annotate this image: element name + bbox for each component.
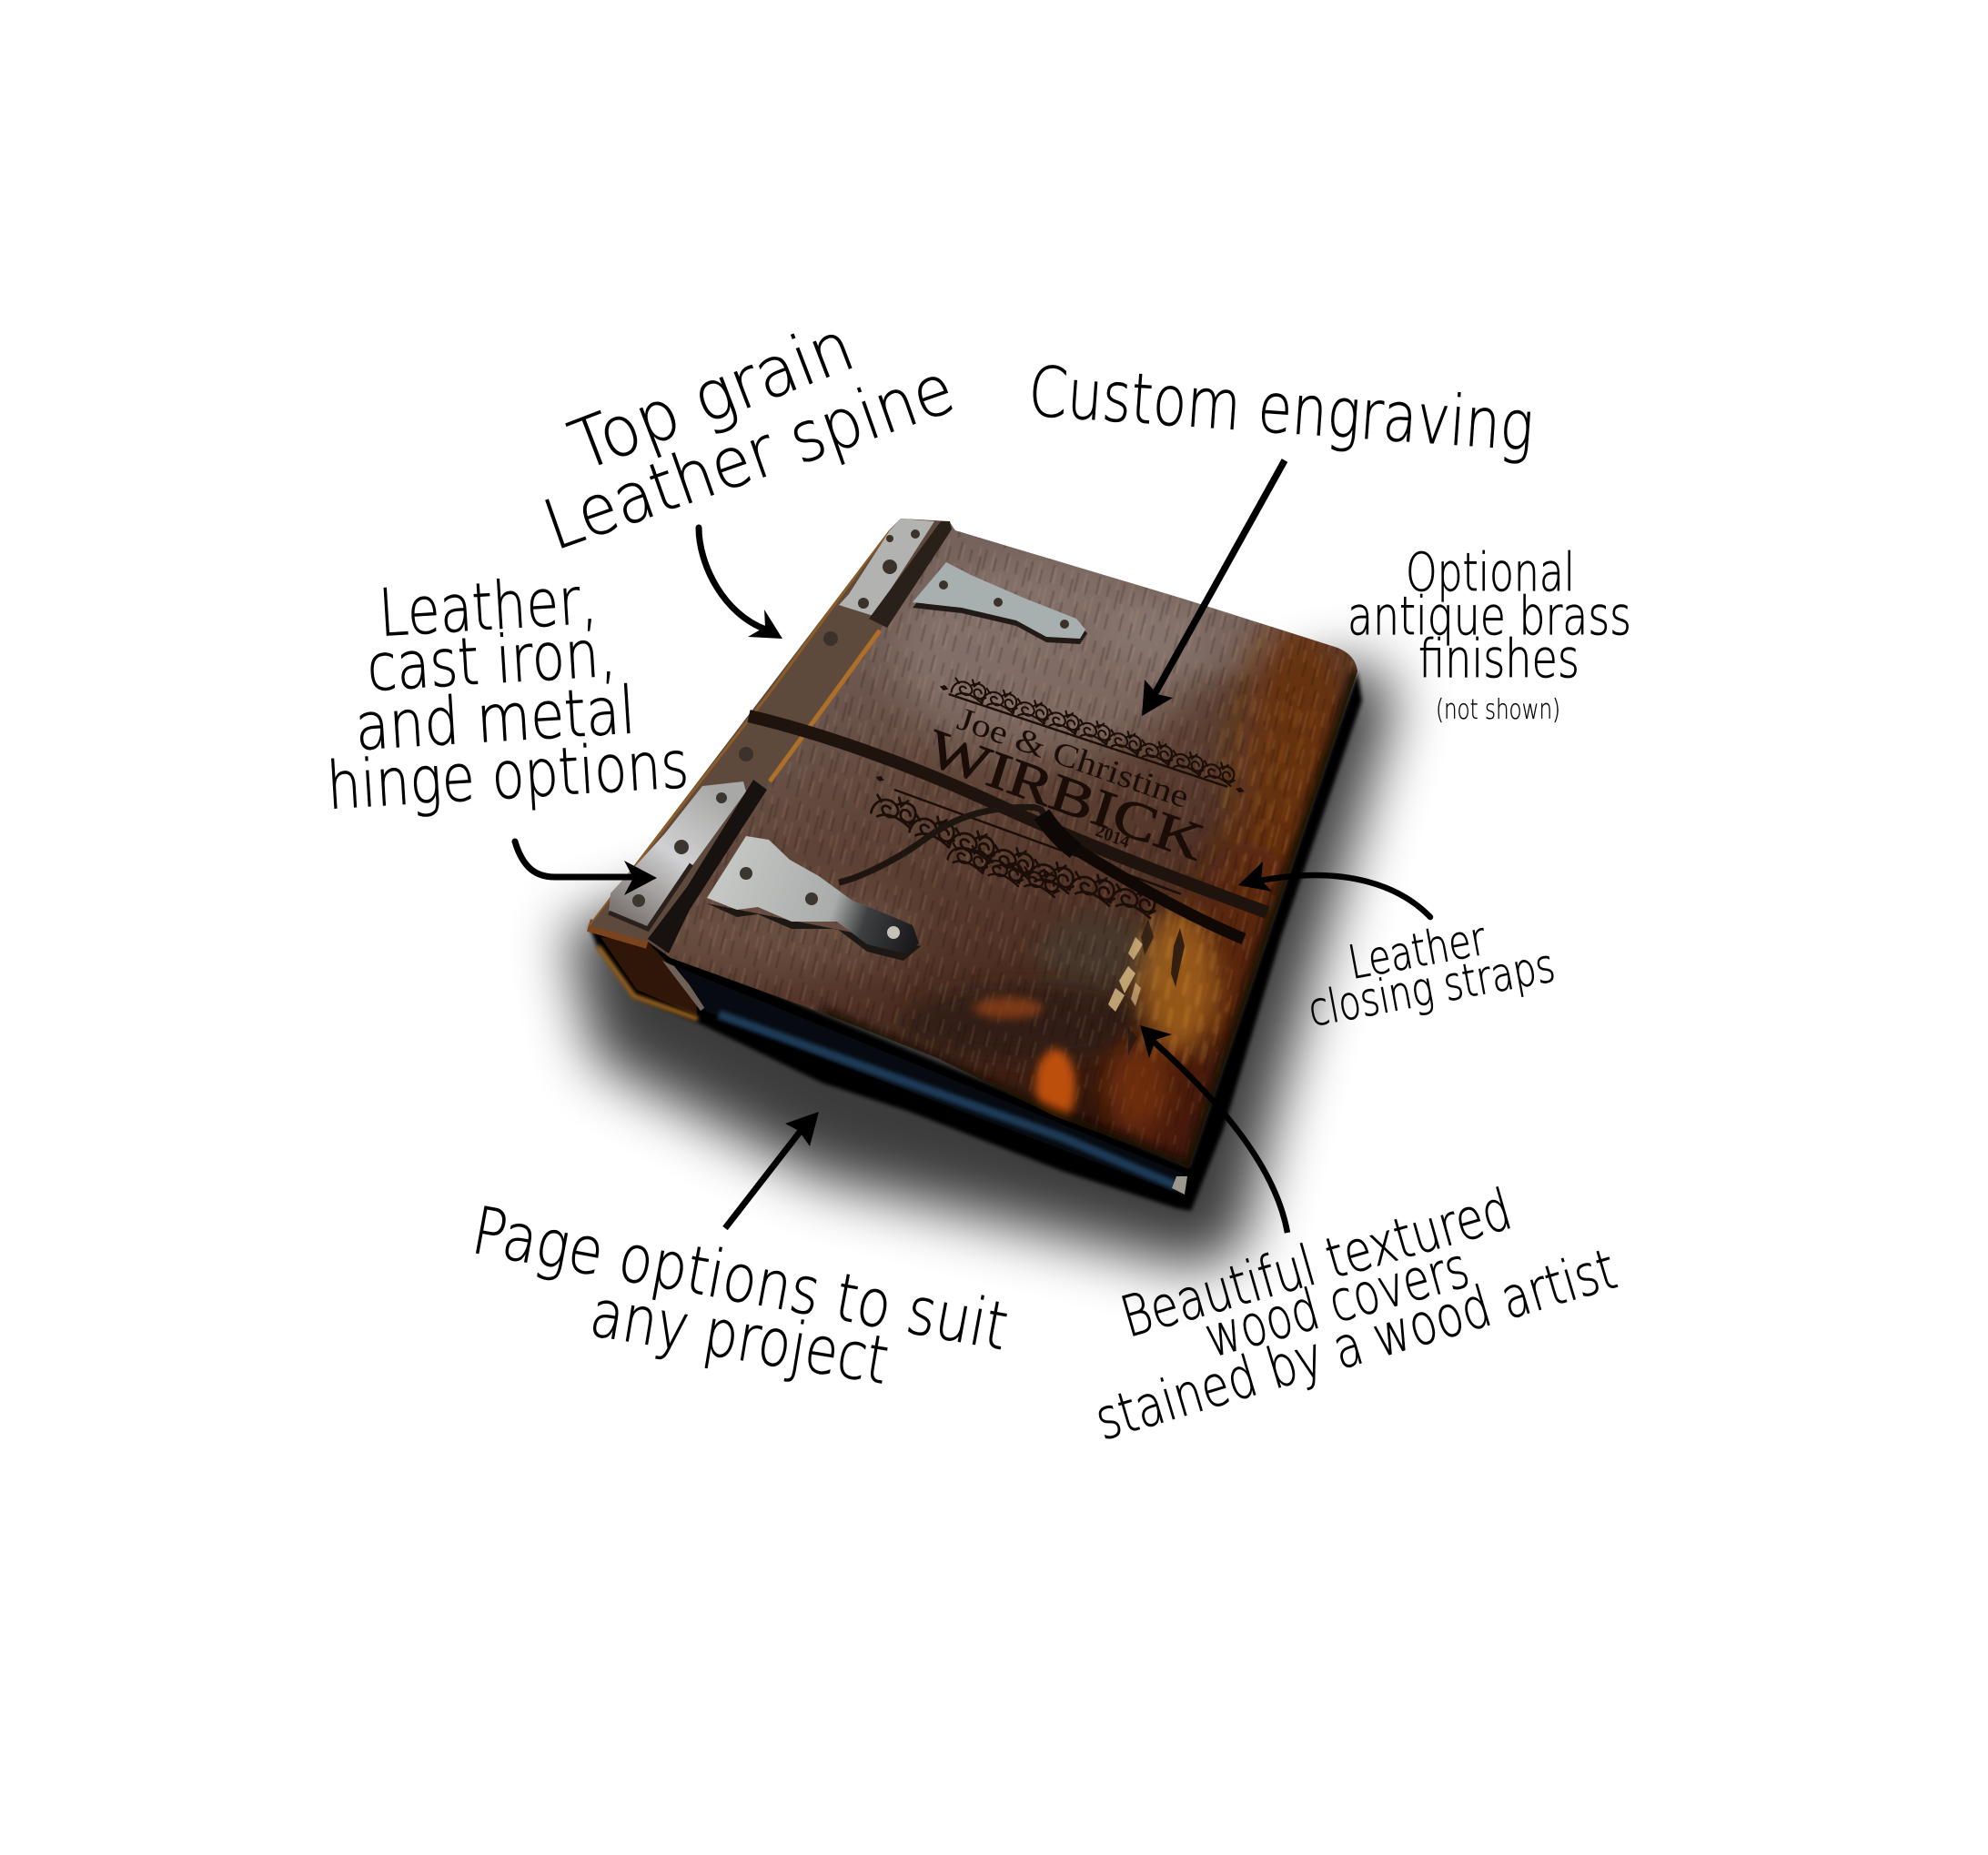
arrow: custom engraving xyxy=(1142,460,1285,716)
label: optional antique brass finishes: Optional xyxy=(1406,541,1575,603)
label: optional antique brass finishes: finishes xyxy=(1418,628,1579,690)
cover damage xyxy=(1108,919,1185,1055)
label: hinge options: hinge options xyxy=(325,726,691,824)
label: hinge options: Leather, xyxy=(377,561,600,651)
engraved text: date: 2014 xyxy=(1093,821,1132,852)
top hinge barrel xyxy=(869,521,952,628)
top hinge strap leaf xyxy=(913,562,1087,644)
bottom hinge xyxy=(609,780,921,961)
label: leather closing straps: Leather xyxy=(1345,912,1490,991)
engraved text: WIRBICK: WIRBICK xyxy=(921,717,1211,872)
label: beautiful textured wood covers: wood covers xyxy=(1197,1234,1476,1370)
label: hinge options xyxy=(325,561,691,824)
leather closing laces xyxy=(839,807,1244,939)
bottom hinge plate xyxy=(609,781,746,927)
top hinge plate xyxy=(839,519,934,616)
label: hinge options: and metal xyxy=(353,671,637,765)
photo: wooden album xyxy=(587,519,1365,1213)
label: custom engraving: Custom engraving xyxy=(1026,350,1537,467)
bottom hinge strap leaf xyxy=(707,836,921,961)
arrow: leather spine xyxy=(699,528,782,639)
label: top grain leather spine: Leather spine xyxy=(533,348,964,566)
spine strip xyxy=(589,519,949,942)
label: beautiful textured wood covers: Beautiful textured xyxy=(1114,1175,1519,1350)
book drop shadow xyxy=(566,660,1397,1269)
arrow: hinge options xyxy=(515,842,657,895)
top hinge screws xyxy=(739,529,1069,761)
label: leather closing straps: closing straps xyxy=(1305,939,1559,1038)
label: beautiful textured wood covers: stained by a wood artist xyxy=(1087,1235,1624,1453)
top hinge xyxy=(739,519,1087,761)
second strap end xyxy=(1053,834,1244,939)
orange burn marks xyxy=(974,691,1319,1133)
page block xyxy=(678,967,1187,1195)
bottom hinge screws xyxy=(632,792,818,907)
engraved names xyxy=(921,700,1211,872)
arrow: wood covers xyxy=(1140,1025,1287,1233)
label: optional antique brass finishes: antique brass xyxy=(1347,585,1631,647)
leather strap xyxy=(749,716,1267,912)
bottom hinge barrel xyxy=(648,780,767,953)
knot xyxy=(1042,814,1075,851)
engraved text: Joe & Christine: Joe & Christine xyxy=(954,700,1194,815)
label: hinge options: cast iron, xyxy=(365,614,619,706)
label: optional antique brass finishes: (not shown) xyxy=(1436,694,1560,726)
wooden front cover xyxy=(590,519,1357,1167)
cover colour patches xyxy=(646,555,1365,1178)
label: top grain leather spine: Top grain xyxy=(560,305,864,487)
engraved ornament, upper xyxy=(938,670,1250,794)
label: optional antique brass finishes xyxy=(1347,541,1631,726)
dark cover edge xyxy=(822,671,1357,1167)
arrow: closing straps xyxy=(1238,862,1430,917)
label: page options: any project xyxy=(585,1275,894,1399)
back cover corner xyxy=(589,925,707,1019)
black underside of album xyxy=(589,671,1362,1211)
tie lace xyxy=(839,807,1048,882)
arrow: page options xyxy=(725,1112,819,1228)
engraved ornament, lower xyxy=(857,774,1184,939)
label: page options: Page options to suit xyxy=(467,1192,1014,1365)
